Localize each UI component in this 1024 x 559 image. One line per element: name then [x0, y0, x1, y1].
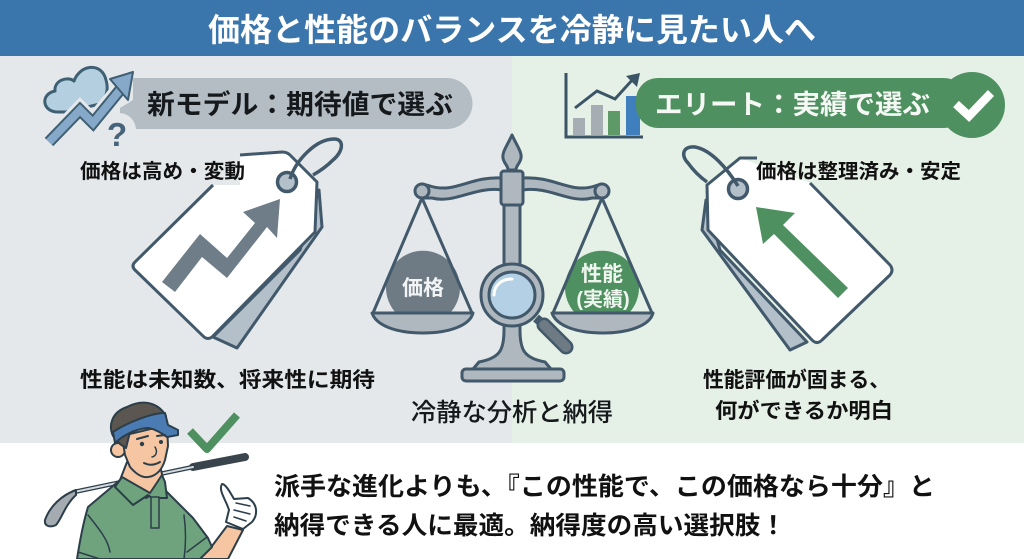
green check mark	[190, 415, 237, 449]
message line one: 派手な進化よりも、『この性能で、この価格なら十分』と	[274, 473, 935, 501]
left weight: price: 価格	[402, 277, 444, 300]
panel: new model	[45, 67, 473, 392]
hair	[111, 403, 166, 448]
panel: right background	[512, 56, 1024, 443]
scale finial and hub	[501, 135, 523, 205]
illustration: golfer	[45, 403, 256, 559]
magnifier	[481, 264, 566, 347]
scale base and post	[462, 205, 564, 381]
shirt collar	[115, 475, 167, 505]
neck	[120, 462, 165, 498]
icon: check mark	[956, 93, 991, 116]
shirt	[77, 480, 212, 559]
glove	[221, 484, 256, 529]
head	[122, 425, 168, 477]
text: what it can do is clear: 何ができるか明白	[715, 399, 893, 423]
title banner	[0, 0, 1024, 56]
text: price settled and stable: 価格は整理済み・安定	[756, 160, 961, 183]
visor	[113, 413, 178, 443]
icon: cloud with rising arrow and question mark	[45, 67, 136, 153]
arm	[200, 526, 243, 559]
icon: price tag with up arrow	[684, 147, 892, 350]
text: price high and variable: 価格は高め・変動	[80, 160, 245, 183]
shirt placket	[151, 497, 159, 528]
icon: balance scale with magnifier	[372, 135, 653, 381]
right weight: performance: (実績)	[576, 288, 630, 311]
bottom message	[274, 473, 935, 540]
panel: elite	[566, 72, 1005, 423]
scale beam	[422, 178, 602, 199]
left pan and strings	[372, 198, 473, 333]
panel: bottom message background	[0, 443, 1024, 559]
panel: left background	[0, 56, 512, 443]
right weight: performance: 性能	[581, 263, 623, 286]
face details	[137, 435, 165, 465]
ear	[111, 443, 125, 457]
heading pill: new model	[120, 78, 473, 129]
icon: bar chart with rising line	[566, 73, 643, 137]
heading pill: elite	[636, 72, 1005, 138]
text: performance evaluation settled: 性能評価が固まる、	[703, 368, 890, 392]
golf club	[45, 457, 245, 526]
shirt sleeve seams	[78, 515, 207, 559]
icon: cloud with rising arrow and question mark: ?	[107, 116, 127, 153]
right pan and strings	[552, 198, 653, 333]
left weight: price	[386, 251, 460, 313]
right weight: performance	[565, 251, 639, 313]
text: calm analysis and acceptance: 冷静な分析と納得	[411, 399, 613, 427]
heading pill: elite: エリート：実績で選ぶ	[655, 90, 930, 120]
title: 価格と性能のバランスを冷静に見たい人へ	[208, 12, 816, 48]
message line two: 納得できる人に最適。納得度の高い選択肢！	[274, 512, 786, 540]
text: performance unknown: 性能は未知数、将来性に期待	[80, 369, 375, 392]
icon: price tag with zigzag arrow	[133, 139, 341, 348]
heading pill: new model: 新モデル：期待値で選ぶ	[147, 89, 453, 120]
